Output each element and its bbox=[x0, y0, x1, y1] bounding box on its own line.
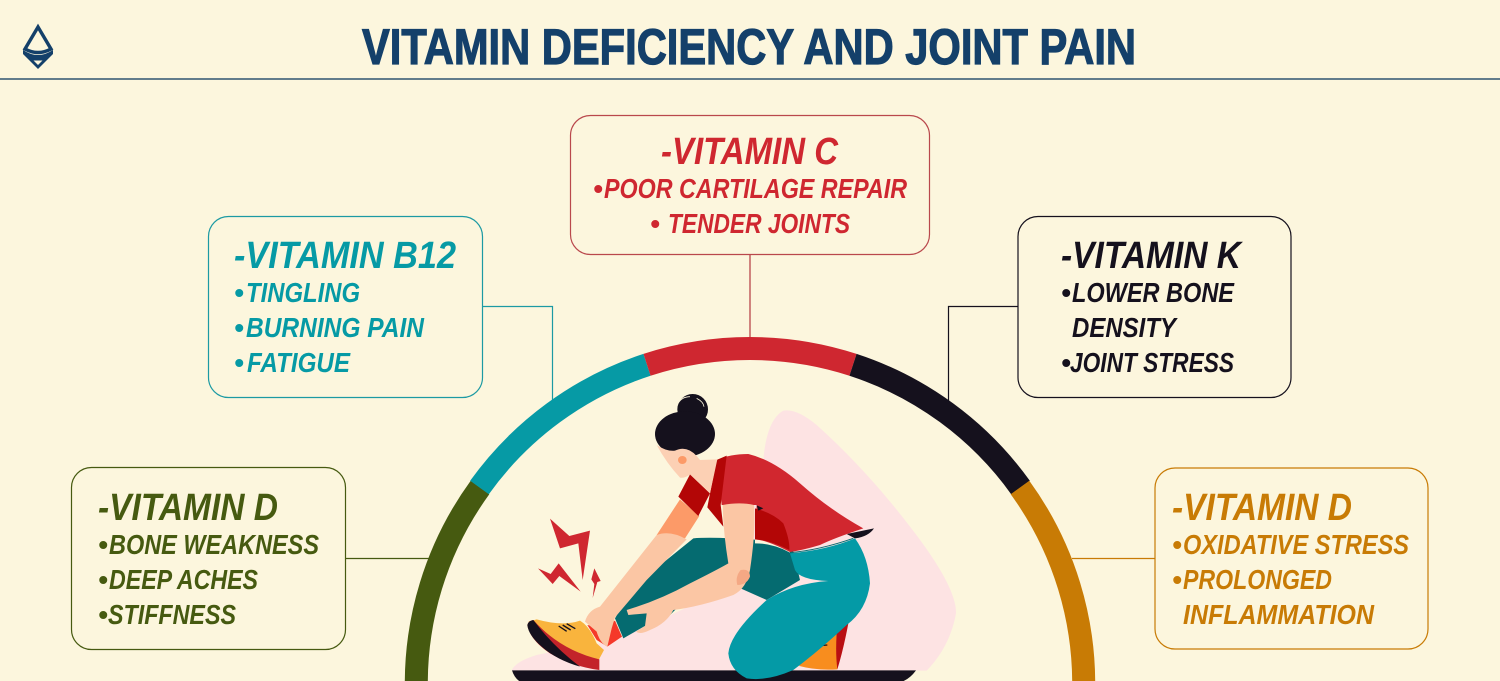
symptoms: vitamin D olive: • bbox=[98, 599, 108, 630]
symptoms: vitamin D olive bbox=[98, 529, 319, 630]
heading: vitamin K: -VITAMIN K bbox=[1061, 235, 1243, 277]
symptoms: vitamin B12: TINGLING bbox=[246, 277, 360, 308]
symptoms: vitamin C bbox=[593, 173, 908, 239]
symptoms: vitamin C: POOR CARTILAGE REPAIR bbox=[604, 173, 908, 204]
symptoms: vitamin K bbox=[1061, 277, 1235, 378]
symptoms: vitamin D olive: • bbox=[98, 529, 108, 560]
symptoms: vitamin B12: • bbox=[234, 347, 244, 378]
symptoms: vitamin D orange: PROLONGED bbox=[1183, 564, 1332, 595]
symptoms: vitamin C: • bbox=[650, 208, 660, 239]
semicircular ring bbox=[416, 348, 1084, 681]
symptoms: vitamin D orange bbox=[1172, 529, 1409, 630]
symptoms: vitamin K: JOINT STRESS bbox=[1070, 347, 1234, 378]
extended leg bbox=[615, 538, 800, 638]
header logo icon bbox=[23, 27, 53, 69]
symptoms: vitamin B12: BURNING PAIN bbox=[246, 312, 425, 343]
shirt dark parts bbox=[678, 474, 710, 516]
symptoms: vitamin B12: FATIGUE bbox=[247, 347, 351, 378]
back upper arm bbox=[657, 499, 699, 538]
symptoms: vitamin D olive: DEEP ACHES bbox=[109, 564, 258, 595]
illustration: woman holding painful ankle bbox=[512, 394, 956, 681]
ankle pain spot bbox=[587, 621, 622, 647]
symptoms: vitamin D orange: • bbox=[1172, 529, 1182, 560]
symptoms: vitamin C: TENDER JOINTS bbox=[668, 208, 850, 239]
panel: vitamin D orange bbox=[1155, 468, 1428, 649]
connector: vitamin D left bbox=[345, 558, 432, 560]
pain bolts bbox=[538, 519, 601, 598]
panel: vitamin D olive bbox=[72, 468, 346, 650]
ring segment: teal bbox=[480, 365, 647, 488]
symptoms: vitamin B12: • bbox=[234, 277, 244, 308]
neck and face bbox=[657, 445, 717, 493]
symptoms: vitamin D orange: • bbox=[1172, 564, 1182, 595]
symptoms: vitamin D olive: STIFFNESS bbox=[108, 599, 236, 630]
ring segment: black bbox=[853, 365, 1020, 488]
symptoms: vitamin D orange: OXIDATIVE STRESS bbox=[1183, 529, 1409, 560]
connector: vitamin D right bbox=[1072, 558, 1155, 560]
connector: vitamin K bbox=[948, 306, 1018, 402]
panel: vitamin C bbox=[570, 116, 930, 254]
symptoms: vitamin D orange: INFLAMMATION bbox=[1183, 599, 1375, 630]
panel: vitamin B12 bbox=[208, 216, 482, 398]
symptoms: vitamin K: • bbox=[1061, 347, 1071, 378]
heading: vitamin D orange: -VITAMIN D bbox=[1172, 487, 1352, 529]
ring segment: orange bbox=[1020, 488, 1084, 681]
heading: vitamin D olive: -VITAMIN D bbox=[98, 487, 278, 529]
symptoms: vitamin B12 bbox=[234, 277, 425, 378]
symptoms: vitamin K: DENSITY bbox=[1072, 312, 1178, 343]
symptoms: vitamin B12: • bbox=[234, 312, 244, 343]
back forearm and hand bbox=[585, 533, 687, 647]
panel: vitamin K bbox=[1018, 216, 1291, 398]
connector: vitamin B12 bbox=[482, 306, 552, 402]
back shoe bbox=[799, 623, 848, 670]
title: VITAMIN DEFICIENCY AND JOINT PAIN bbox=[362, 19, 1136, 75]
ring segment: red bbox=[647, 348, 853, 365]
symptoms: vitamin D olive: BONE WEAKNESS bbox=[109, 529, 319, 560]
hair bbox=[655, 394, 715, 457]
symptoms: vitamin K: LOWER BONE bbox=[1072, 277, 1235, 308]
floor bar bbox=[512, 670, 916, 681]
front arm bbox=[627, 503, 754, 633]
ring segment: olive bbox=[416, 488, 480, 681]
waist gap and hem bbox=[755, 539, 790, 553]
symptoms: vitamin C: • bbox=[593, 173, 603, 204]
heading: vitamin B12: -VITAMIN B12 bbox=[234, 235, 456, 277]
pink blob background bbox=[512, 410, 956, 671]
teal pants bbox=[728, 538, 870, 679]
symptoms: vitamin K: • bbox=[1061, 277, 1071, 308]
shirt bbox=[717, 454, 863, 552]
front shoe bbox=[527, 619, 604, 670]
connector: vitamin C bbox=[749, 254, 751, 338]
symptoms: vitamin D olive: • bbox=[98, 564, 108, 595]
heading: vitamin C: -VITAMIN C bbox=[661, 131, 838, 173]
